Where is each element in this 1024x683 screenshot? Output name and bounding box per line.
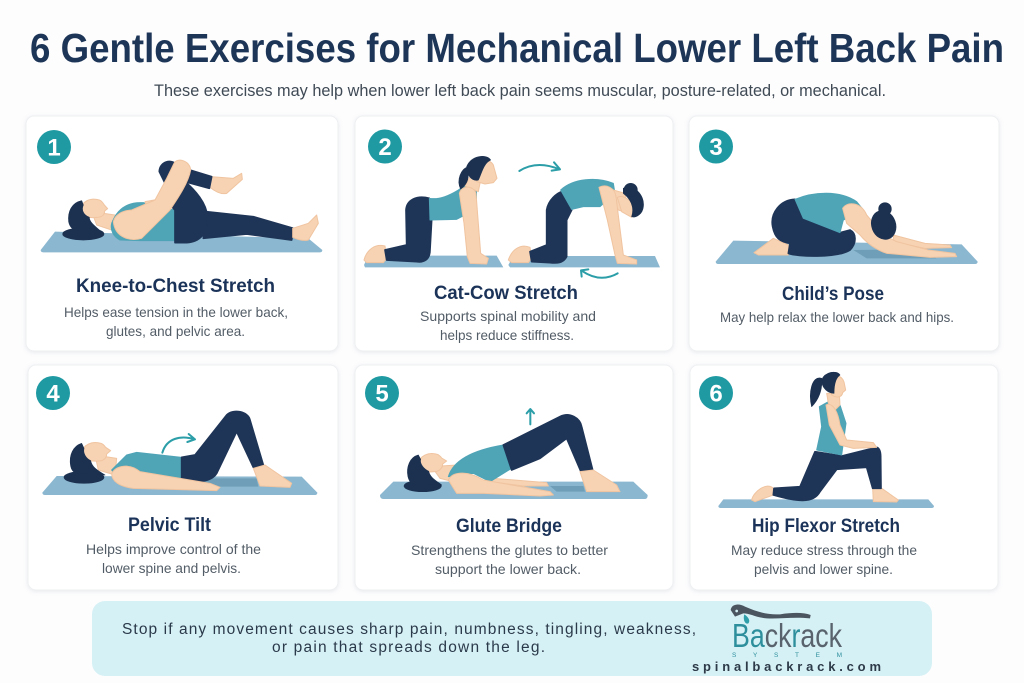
panel: cat-cow stretch [355,116,673,351]
description: Helps ease tension in the lower back, [64,304,288,320]
logo: Backrack System [692,604,881,674]
heading: Child’s Pose [782,284,884,305]
website: spinalbackrack.com [692,659,881,674]
illustration: child's pose [716,193,978,264]
description: support the lower back. [435,561,581,577]
description: glutes, and pelvic area. [106,323,245,339]
badge 1 [37,130,71,164]
arrow: tilt curve [162,434,195,453]
warning text: Stop if any movement causes sharp pain, numbness, tingling, weakness, [122,621,696,638]
logo tagline: SYSTEM [732,652,842,659]
arrow: up [527,409,534,424]
heading: Glute Bridge [456,516,562,537]
badge 3 [699,130,733,164]
badge 2 [368,130,402,164]
badge 2: 2 [378,134,392,161]
callout: safety warning [92,601,932,676]
badge 5 [365,376,399,410]
heading: Cat-Cow Stretch [434,283,578,304]
panel: glute bridge [355,365,673,590]
heading: Knee-to-Chest Stretch [76,276,275,297]
illustration: pelvic tilt [42,411,317,495]
description: Supports spinal mobility and [420,308,596,324]
description [86,541,261,576]
description [731,542,917,577]
illustration: glute bridge [380,415,648,499]
badge 4 [36,376,70,410]
description: May help relax the lower back and hips. [720,309,954,325]
panel: knee-to-chest stretch [26,116,338,351]
warning text: or pain that spreads down the leg. [272,639,545,656]
illustration: hip flexor [718,372,934,508]
description: pelvis and lower spine. [754,561,893,577]
description: helps reduce stiffness. [440,327,574,343]
description [411,542,608,577]
badge 1: 1 [47,134,61,162]
heading: Pelvic Tilt [128,515,212,536]
badge 3: 3 [709,134,723,161]
logo wordmark: Backrack [732,617,842,654]
description [420,308,596,343]
arrow: bottom curve [581,269,618,278]
warning text [122,621,696,656]
badge 6: 6 [709,380,723,408]
illustration: knee to chest [41,160,322,252]
illustration: cat-cow [364,156,660,267]
badge 6 [699,376,733,410]
panel: pelvic tilt [28,365,338,590]
arrow: top curve [519,162,560,171]
heading: Hip Flexor Stretch [752,516,900,537]
badge 5: 5 [375,380,389,408]
description: Strengthens the glutes to better [411,542,608,558]
description: lower spine and pelvis. [102,560,241,576]
panel: hip flexor stretch [690,365,998,590]
description: May reduce stress through the [731,542,917,558]
description: Helps improve control of the [86,541,261,557]
badge 4: 4 [46,380,60,408]
panel: child's pose [689,116,999,351]
description [64,304,288,339]
subtitle: These exercises may help when lower left back pain seems muscular, posture-related, or mechanical. [154,81,886,100]
logo spine mark [731,604,811,624]
